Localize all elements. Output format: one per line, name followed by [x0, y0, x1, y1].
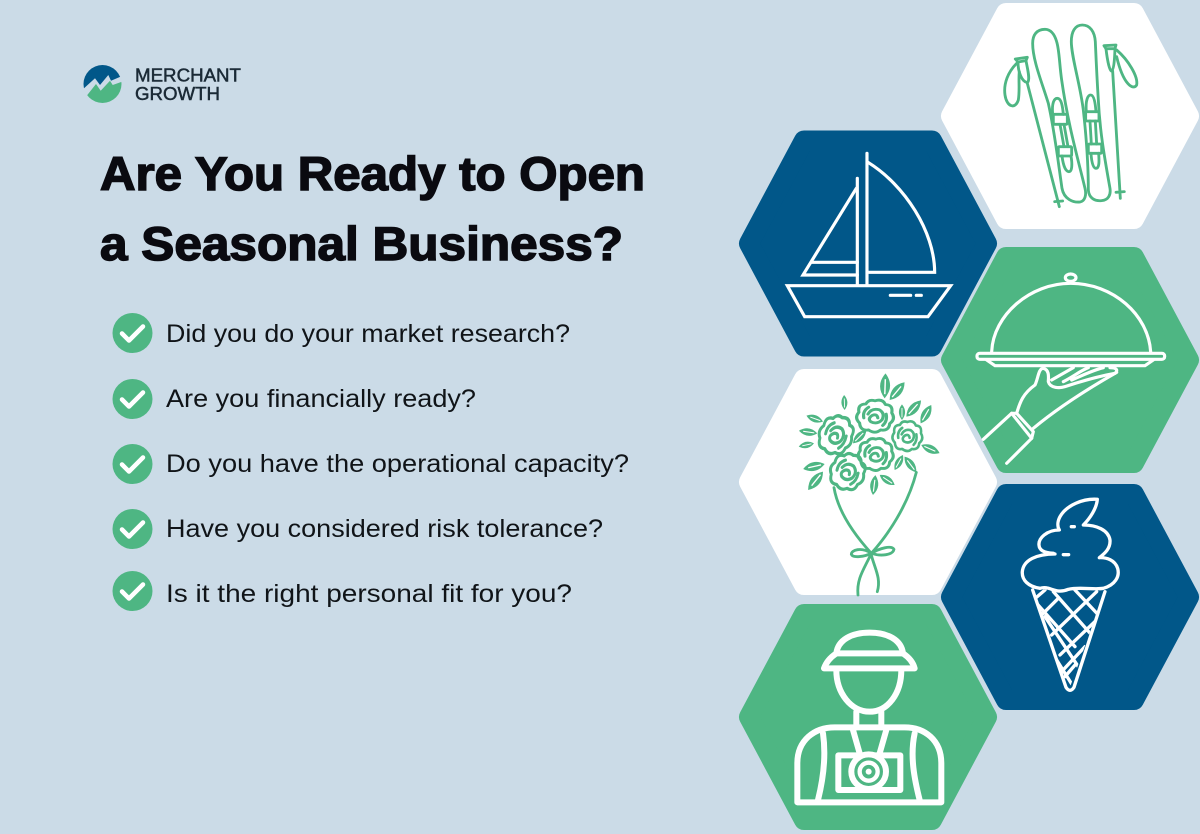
title: [100, 147, 645, 270]
check item 4: [112, 509, 603, 549]
hexagon: skis: [951, 13, 1189, 219]
icon: sailboat: [787, 153, 951, 317]
icon: ice cream cone: [1022, 499, 1118, 690]
hexagon: serving cloche: [951, 257, 1189, 463]
check item 5: [112, 571, 572, 611]
check item 1: Did you do your market research?: [166, 320, 570, 348]
check item 2: [112, 379, 476, 419]
title: Are You Ready to Open: [100, 147, 645, 200]
hexagon: bouquet: [749, 373, 987, 595]
hexagon: ice cream: [951, 494, 1189, 700]
check item 3: Do you have the operational capacity?: [166, 450, 629, 478]
logo wordmark: MERCHANT: [135, 64, 241, 86]
hexagon: photographer: [749, 614, 987, 820]
icon: hand holding cloche: [977, 274, 1165, 463]
title: a Seasonal Business?: [100, 217, 623, 270]
checklist: [112, 313, 629, 611]
icon: skis and poles: [1005, 25, 1137, 207]
logo: Merchant Growth: [84, 65, 241, 103]
icon: photographer with camera: [797, 633, 941, 802]
logo wordmark: [135, 64, 241, 104]
check item 3: [112, 444, 629, 484]
icon: flower bouquet: [798, 373, 941, 595]
check item 5: Is it the right personal fit for you?: [166, 580, 572, 608]
check item 2: Are you financially ready?: [166, 385, 476, 413]
check item 1: [112, 313, 570, 353]
icon: logo mountain circle: [84, 65, 122, 103]
check item 4: Have you considered risk tolerance?: [166, 515, 603, 543]
hexagon: sailboat: [749, 140, 987, 346]
logo wordmark: GROWTH: [135, 83, 220, 104]
